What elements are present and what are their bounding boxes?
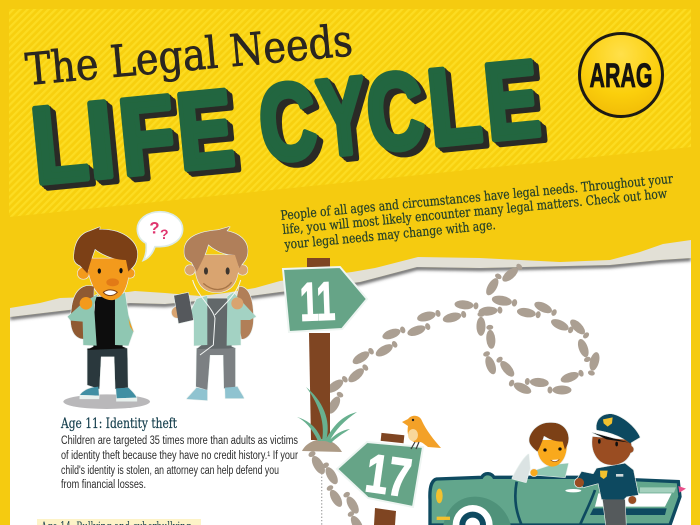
mouth	[103, 290, 117, 296]
police officer	[575, 414, 640, 525]
text block: age 11: child's identity is stolen, an attorney can help defend you	[61, 465, 279, 477]
head	[78, 268, 89, 279]
car	[430, 474, 686, 525]
title: Life Cycle: L	[423, 43, 486, 168]
shoes	[80, 387, 99, 396]
character: boy with phone	[172, 227, 256, 400]
title: Life Cycle: C	[254, 59, 321, 184]
signpost: age 11: 11	[299, 271, 336, 333]
striped header panel	[9, 9, 691, 217]
speech bubble: ?	[160, 226, 169, 242]
eyes	[98, 268, 101, 274]
title: Life Cycle: I	[81, 78, 120, 201]
intro text: your legal needs may change with age.	[283, 218, 496, 253]
intro text	[280, 172, 674, 253]
car with boy and police officer	[430, 414, 686, 525]
eyes	[204, 267, 208, 275]
footprints trail	[307, 262, 601, 525]
shoes	[187, 388, 207, 400]
logo: ARAG	[580, 34, 662, 116]
signpost: age 11	[283, 258, 367, 440]
hair	[184, 227, 248, 272]
title: The Legal Needs: The Legal Needs	[23, 15, 355, 96]
heading: age 14	[37, 519, 201, 525]
earphone wires	[193, 280, 241, 355]
character: worried boy	[63, 212, 183, 409]
jacket	[68, 294, 97, 346]
title: Life Cycle: Y	[313, 55, 372, 179]
torso	[197, 298, 236, 349]
title: Life Cycle: C	[361, 49, 429, 174]
hands	[231, 297, 243, 309]
speech bubble: ?	[149, 218, 160, 237]
text block: age 11: Children are targeted 35 times more than adults as victims	[61, 435, 298, 447]
icon: orange bird	[402, 416, 441, 449]
signpost: age 17	[337, 433, 423, 525]
torso	[87, 297, 127, 350]
head	[185, 265, 195, 275]
speech bubble	[137, 212, 183, 260]
logo: ARAG: ARAG	[590, 57, 652, 95]
title: Life Cycle: E	[479, 39, 545, 163]
backpack	[71, 286, 94, 339]
smile	[203, 282, 232, 289]
hair	[74, 227, 137, 273]
yellow side borders	[0, 150, 700, 525]
signpost: age 17: 17	[362, 443, 415, 509]
jacket	[191, 296, 207, 346]
legs	[87, 348, 128, 389]
text block: age 11: from financial losses.	[61, 479, 146, 491]
heading: age 11: Age 11: Identity theft	[60, 416, 177, 432]
legs	[196, 348, 235, 390]
white page area with torn paper edge	[10, 240, 691, 525]
backpack	[235, 287, 253, 339]
title: Life Cycle: F	[114, 73, 180, 199]
title: Life Cycle: L	[26, 82, 93, 207]
grass tuft and mound	[297, 387, 357, 452]
boy in car	[512, 423, 569, 482]
nose	[106, 278, 119, 286]
title: Life Cycle: E	[172, 68, 239, 193]
phone	[174, 293, 193, 323]
hand	[80, 297, 92, 310]
text block: age 11: of identity theft because they have no credit history.¹ If your	[61, 450, 298, 462]
title: Life Cycle	[26, 37, 545, 207]
text block: age 11	[61, 435, 298, 491]
